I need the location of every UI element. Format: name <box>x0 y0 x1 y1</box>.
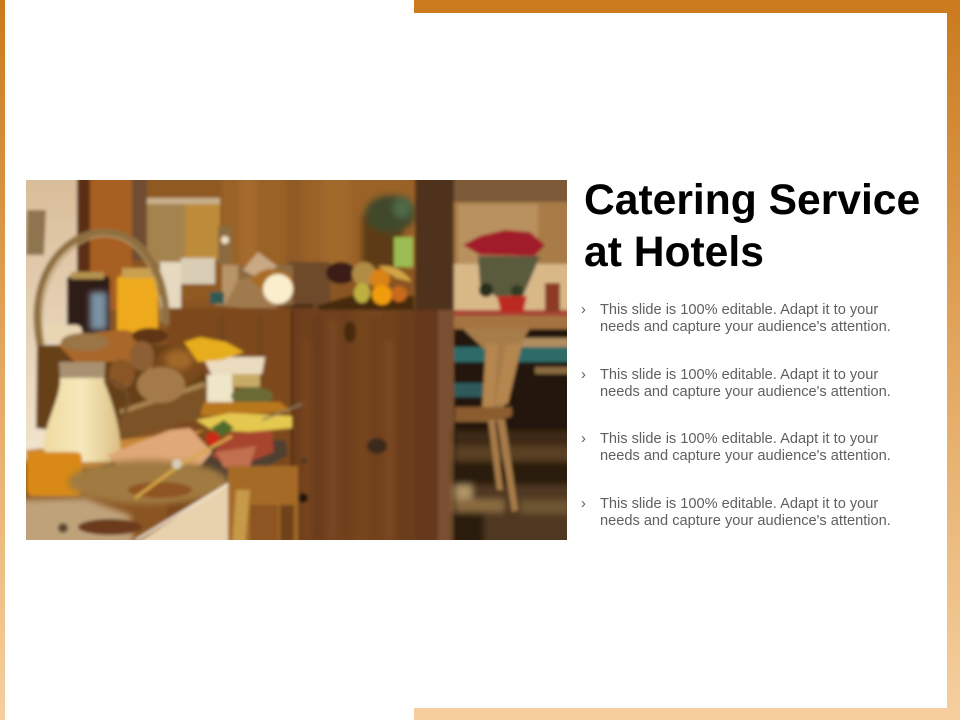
photo: hotel breakfast buffet <box>26 180 567 540</box>
chair <box>455 328 530 512</box>
meat platter <box>100 420 288 482</box>
back room <box>454 170 584 552</box>
hanging bag <box>26 210 46 255</box>
cheese board <box>196 374 302 432</box>
wooden door and cabinet <box>167 308 454 548</box>
bullet 4: › <box>581 496 586 512</box>
bullet 4: needs and capture your audience's attention. <box>600 513 891 529</box>
left white wall <box>10 170 77 460</box>
table surface behind pitcher <box>26 430 205 470</box>
wood wall <box>215 170 420 308</box>
bullet 2: needs and capture your audience's attention. <box>600 384 891 400</box>
plant in green pot <box>365 195 415 267</box>
bullet 2: This slide is 100% editable. Adapt it to your <box>600 367 878 383</box>
fruit bowl <box>316 262 414 310</box>
bullet 3: needs and capture your audience's attention. <box>600 448 891 464</box>
poinsettia plant <box>463 230 560 313</box>
title: Catering Service <box>584 176 920 224</box>
bullet 3: › <box>581 431 586 447</box>
bullet 1: This slide is 100% editable. Adapt it to your <box>600 302 878 318</box>
wooden post <box>415 170 454 315</box>
cereal dispensers <box>147 198 232 308</box>
bullet 4: This slide is 100% editable. Adapt it to your <box>600 496 878 512</box>
bullet 2 <box>581 367 891 400</box>
jam and juice jars <box>67 268 158 334</box>
table front with glass bowls <box>10 436 298 556</box>
yellow eggs bowl <box>184 337 265 376</box>
orange jam glass <box>27 452 82 496</box>
bullet 2: › <box>581 367 586 383</box>
bread on counter <box>224 252 314 322</box>
bullet 1: needs and capture your audience's attention. <box>600 319 891 335</box>
bullet 4 <box>581 496 891 529</box>
basket with handle and bread rolls <box>36 232 209 440</box>
bullet 3: This slide is 100% editable. Adapt it to your <box>600 431 878 447</box>
bullet 1 <box>581 302 891 335</box>
bullet 1: › <box>581 302 586 318</box>
title: at Hotels <box>584 228 764 276</box>
bullet 3 <box>581 431 891 464</box>
title <box>584 176 920 276</box>
milk pitcher <box>44 362 128 462</box>
